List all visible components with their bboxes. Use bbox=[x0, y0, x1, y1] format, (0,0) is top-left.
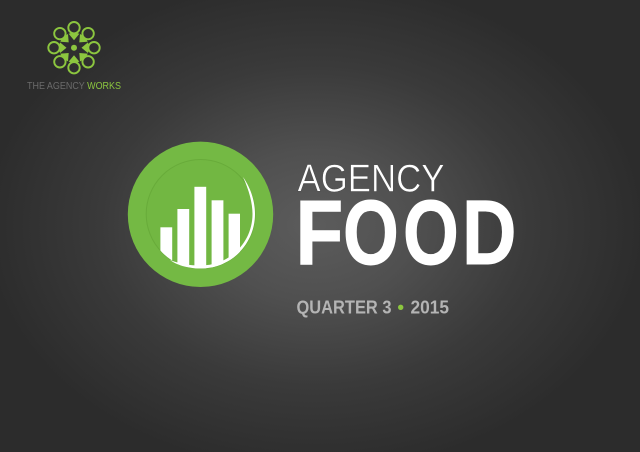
heading: Food: O bbox=[343, 181, 399, 284]
heading: Food: O bbox=[403, 181, 459, 284]
title bbox=[296, 158, 516, 284]
white plate crescent highlight bbox=[170, 177, 255, 268]
plate inner rim bbox=[146, 160, 255, 268]
slide cover bbox=[27, 21, 586, 430]
subtitle: quarter and year: QUARTER 3 bbox=[296, 298, 392, 318]
icon: green plate with bar chart bbox=[128, 142, 273, 287]
green bullet bbox=[398, 305, 403, 310]
heading: Food bbox=[296, 181, 516, 284]
logo wordmark: THE AGENCY WORKS bbox=[27, 80, 121, 92]
heading: Food: F bbox=[296, 182, 343, 284]
plate disc bbox=[128, 142, 273, 287]
heading: Agency: AGENCY bbox=[298, 158, 444, 200]
subtitle: quarter and year: 2015 bbox=[410, 298, 449, 318]
logo: The Agency Works bbox=[27, 22, 121, 92]
icon: flower emblem bbox=[48, 22, 100, 73]
subtitle: quarter and year bbox=[296, 298, 449, 318]
heading: Food: D bbox=[462, 181, 516, 283]
white bar chart bbox=[160, 187, 240, 272]
